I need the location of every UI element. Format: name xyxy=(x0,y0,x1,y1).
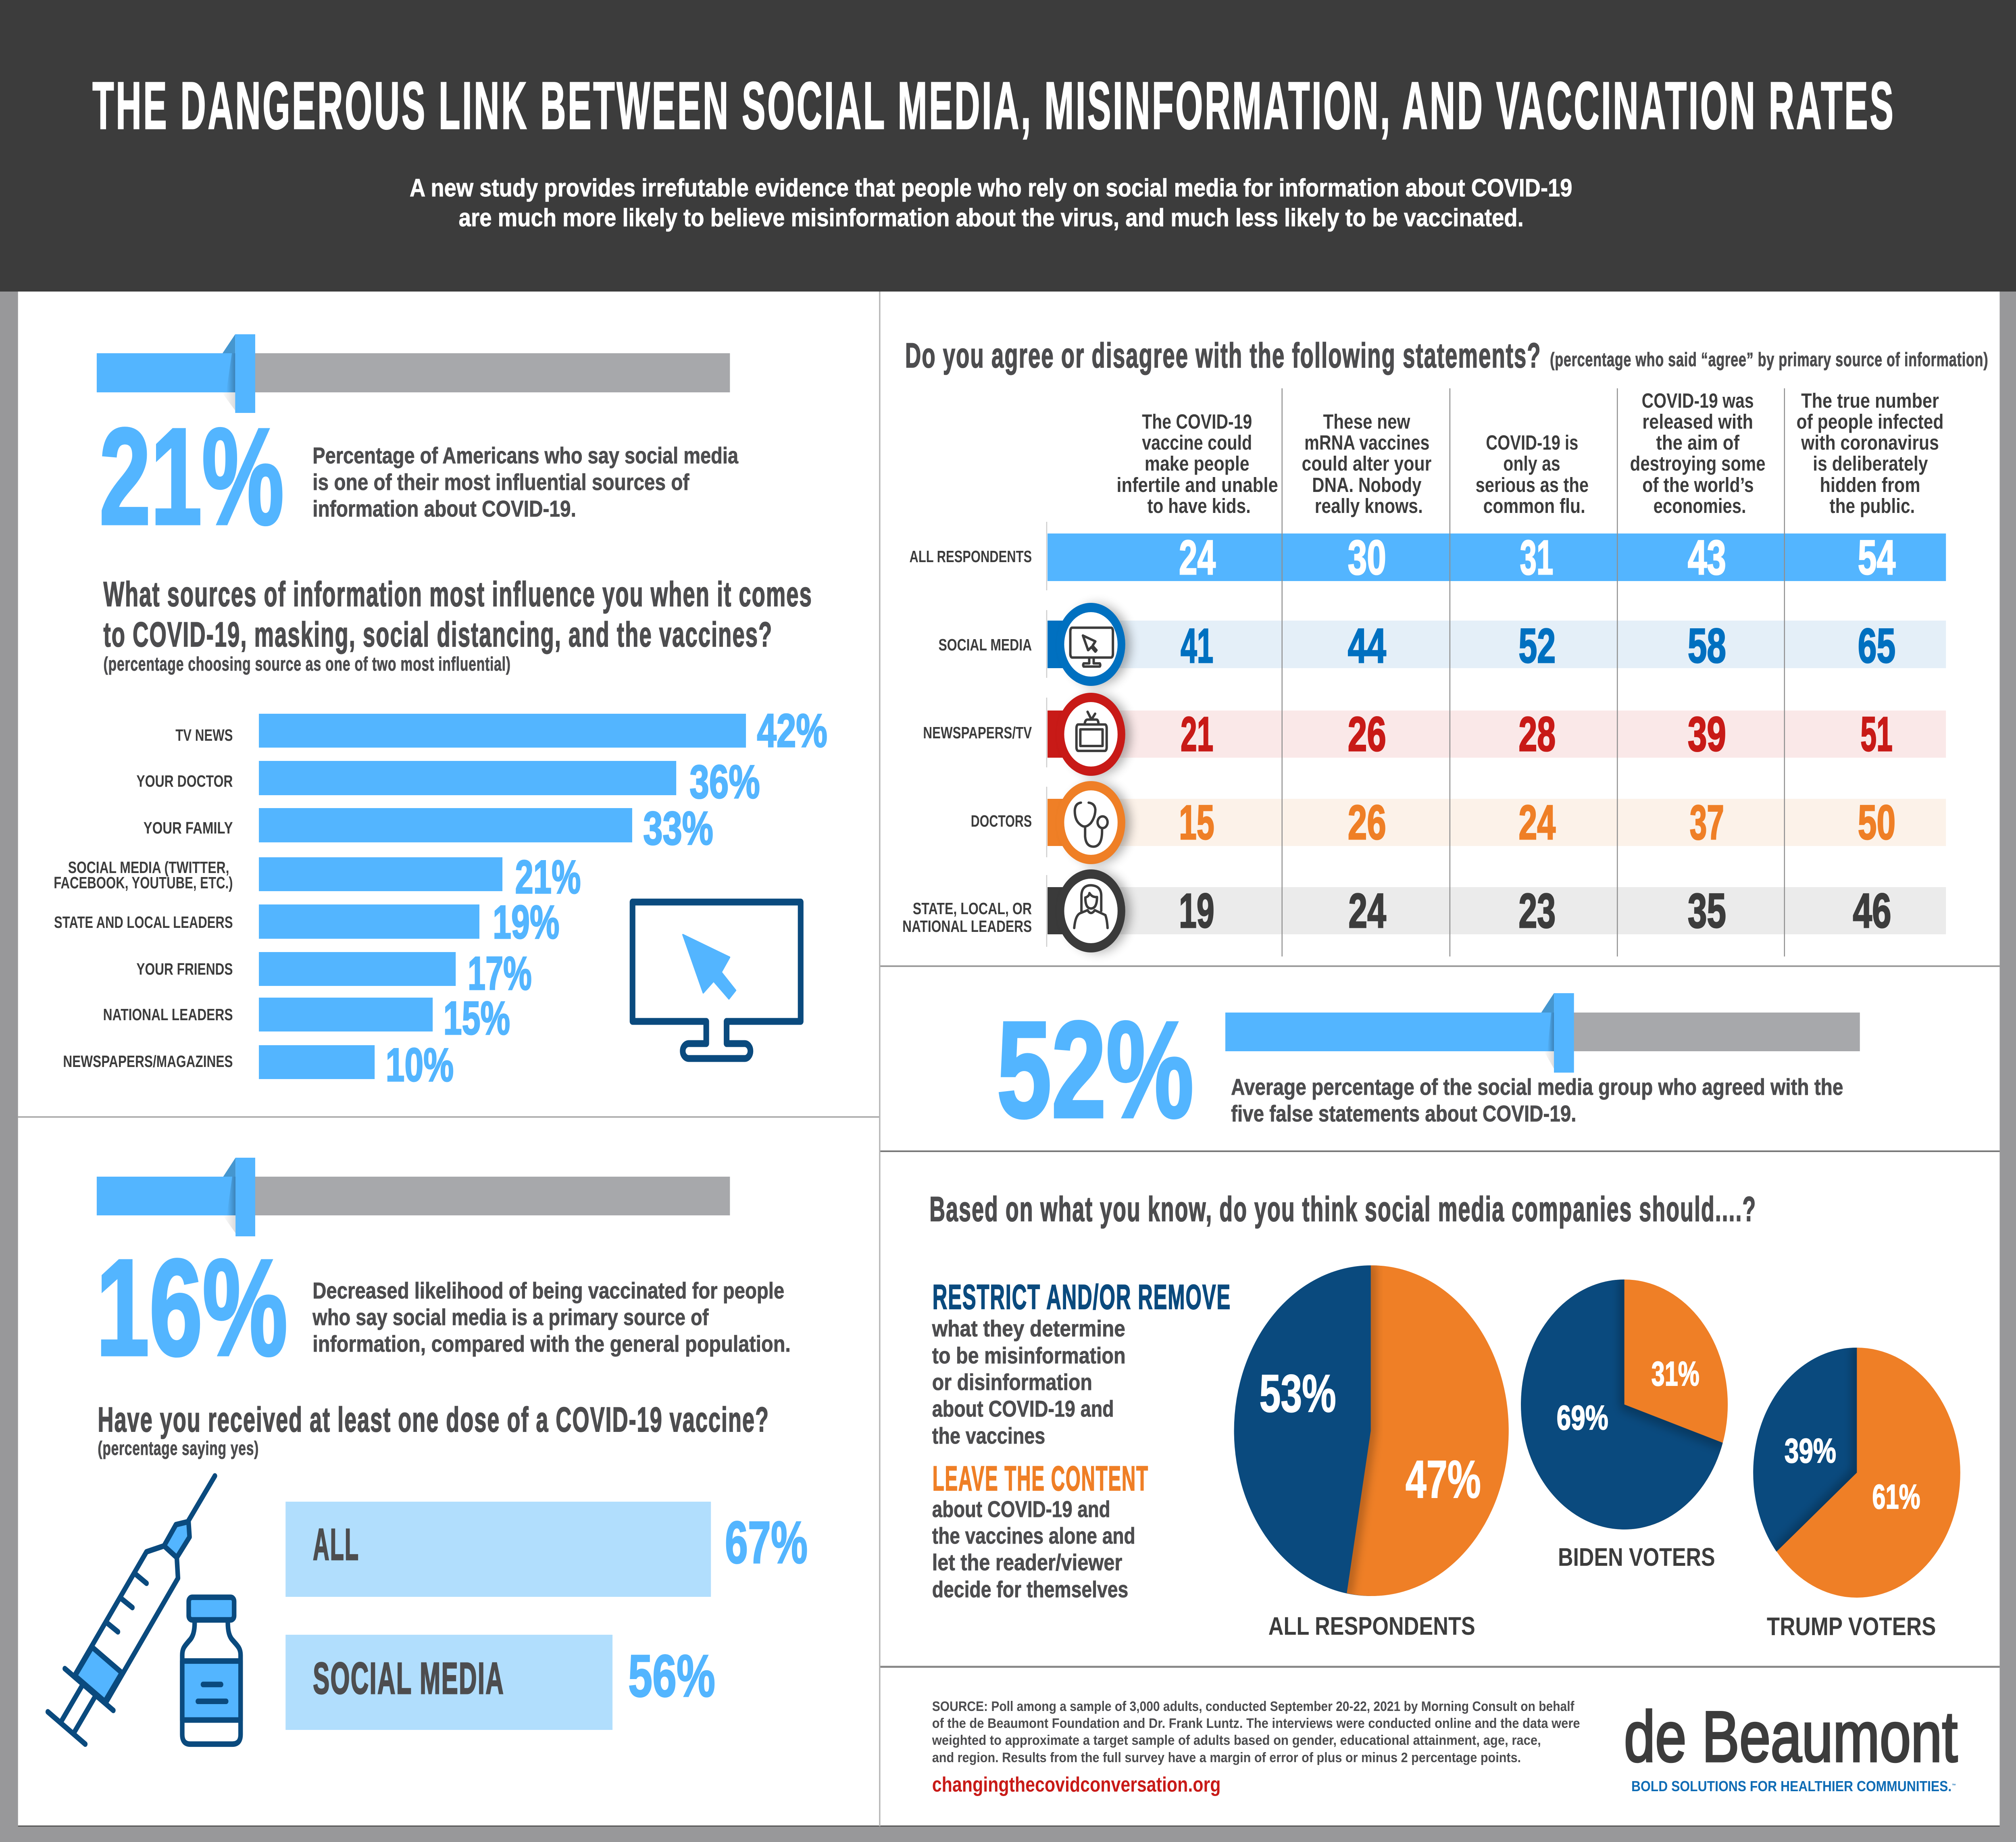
logo: de Beaumont: BOLD SOLUTIONS FOR HEALTHIER COMMUNITIES. xyxy=(1631,1778,1951,1794)
column 5 header: of people infected xyxy=(1797,410,1943,433)
row: all respondents xyxy=(910,530,1946,585)
bar: your doctor: 36% xyxy=(689,755,760,808)
column 2 header: DNA. Nobody xyxy=(1312,473,1422,496)
panel: 16 percent stat xyxy=(96,1158,791,1384)
row: all respondents: 24 xyxy=(1179,530,1216,585)
source note: of the de Beaumont Foundation and Dr. Frank Luntz. The interviews were conducted online and the data were xyxy=(932,1715,1580,1731)
row: social media: 58 xyxy=(1688,618,1726,673)
bar: your family xyxy=(144,802,713,854)
logo: de Beaumont: ™ xyxy=(1952,1783,1956,1788)
row: newspapers and TV: 51 xyxy=(1860,706,1893,761)
row: state, local, or national leaders: 24 xyxy=(1348,883,1386,938)
bar: TV news xyxy=(175,704,827,757)
column 1 header xyxy=(1116,410,1278,517)
legend: restrict and/or remove: or disinformation xyxy=(932,1370,1092,1395)
progress bar: 16 percent xyxy=(97,1158,730,1236)
heading: vaccine dose question: (percentage saying yes) xyxy=(98,1438,259,1459)
heading: sources of information xyxy=(103,575,812,675)
bar: all: 67% xyxy=(725,1509,808,1576)
bar: social media: 21% xyxy=(515,850,581,903)
column 3 header: serious as the xyxy=(1476,473,1589,496)
description: Percentage of Americans who say social media xyxy=(312,443,739,469)
heading: vaccine dose question: Have you received at least one dose of a COVID-19 vaccine? xyxy=(98,1400,769,1439)
bar: state and local leaders xyxy=(54,896,560,948)
source note: SOURCE: Poll among a sample of 3,000 adults, conducted September 20-22, 2021 by Morning Consult on behalf xyxy=(932,1698,1574,1714)
column 5 header: the public. xyxy=(1829,494,1915,517)
pie chart: Trump voters: 39% xyxy=(1785,1432,1836,1470)
heading: social media companies question: Based on what you know, do you think social media companies should....? xyxy=(929,1190,1756,1229)
row: newspapers and TV: 39 xyxy=(1688,706,1726,761)
column 5 header: hidden from xyxy=(1820,473,1920,496)
column 4 header: economies. xyxy=(1654,494,1746,517)
row: newspapers and TV: 26 xyxy=(1348,706,1386,761)
legend: leave the content: decide for themselves xyxy=(932,1577,1128,1602)
bar: newspapers and magazines: NEWSPAPERS/MAGAZINES xyxy=(63,1052,233,1071)
row: state, local, or national leaders: 35 xyxy=(1688,883,1726,938)
bar: social media xyxy=(285,1635,715,1730)
icon: social media badge xyxy=(1056,603,1131,686)
column 2 header: could alter your xyxy=(1302,452,1431,475)
column 2 header xyxy=(1302,410,1431,517)
icon: stethoscope badge xyxy=(1056,781,1131,864)
bar: national leaders: 15% xyxy=(444,992,510,1044)
description: Average percentage of the social media group who agreed with the xyxy=(1231,1075,1843,1100)
pie chart: Biden voters: 69% xyxy=(1557,1398,1608,1437)
bar: all xyxy=(285,1502,808,1597)
bar: social media: 56% xyxy=(628,1642,715,1709)
icon: syringe and vial xyxy=(48,1476,241,1744)
panel: 52 percent stat xyxy=(997,993,1860,1146)
row: doctors: 26 xyxy=(1348,795,1386,850)
pie chart: Trump voters xyxy=(1753,1345,1960,1641)
pie chart: all respondents: 53% xyxy=(1259,1363,1336,1423)
column 2 header: mRNA vaccines xyxy=(1304,431,1429,454)
bar: your family: 33% xyxy=(643,802,713,854)
bar chart: sources of information xyxy=(54,704,827,1091)
bar: TV news: TV NEWS xyxy=(175,726,233,744)
row: newspapers and TV xyxy=(923,693,1946,776)
bar: your friends xyxy=(136,947,532,1000)
column 3 header xyxy=(1476,431,1589,517)
bar: state and local leaders: 19% xyxy=(493,896,560,948)
row: newspapers and TV: 28 xyxy=(1518,706,1556,761)
legend: leave the content: the vaccines alone and xyxy=(932,1523,1135,1549)
pie chart: all respondents xyxy=(1234,1262,1509,1640)
column 1 header: to have kids. xyxy=(1147,494,1251,517)
icon: leader badge xyxy=(1056,869,1131,952)
progress bar: 52 percent xyxy=(1225,993,1860,1073)
description xyxy=(1231,1075,1843,1127)
heading: sources of information: to COVID-19, masking, social distancing, and the vaccines? xyxy=(103,615,773,654)
row: state, local, or national leaders: NATIONAL LEADERS xyxy=(902,917,1032,936)
column 1 header: vaccine could xyxy=(1142,431,1252,454)
big number 21%: 21% xyxy=(100,400,284,553)
bar: national leaders xyxy=(103,992,510,1044)
subtitle xyxy=(410,174,1572,232)
row: social media xyxy=(938,603,1946,686)
row: all respondents: ALL RESPONDENTS xyxy=(910,547,1032,566)
legend: restrict and/or remove: about COVID-19 and xyxy=(932,1396,1114,1422)
row: state, local, or national leaders xyxy=(902,869,1946,952)
row: doctors: 24 xyxy=(1518,795,1556,850)
column 4 header: destroying some xyxy=(1630,452,1766,475)
column 3 header: COVID-19 is xyxy=(1486,431,1578,454)
row: state, local, or national leaders: STATE, LOCAL, OR xyxy=(913,899,1032,918)
row: all respondents: 43 xyxy=(1688,530,1726,585)
column 5 header: with coronavirus xyxy=(1801,431,1939,454)
pie chart: Biden voters: BIDEN VOTERS xyxy=(1558,1543,1715,1571)
pie chart: Biden voters xyxy=(1521,1276,1728,1571)
row: state, local, or national leaders: 46 xyxy=(1853,883,1891,938)
icon: monitor with cursor xyxy=(633,902,801,1059)
pie chart: Trump voters: TRUMP VOTERS xyxy=(1767,1613,1936,1641)
description: five false statements about COVID-19. xyxy=(1231,1101,1576,1127)
subtitle: A new study provides irrefutable evidence that people who rely on social media for information about COVID-19 xyxy=(410,174,1572,202)
description: Decreased likelihood of being vaccinated for people xyxy=(312,1278,784,1304)
pie chart: Trump voters: 61% xyxy=(1872,1477,1920,1516)
column headers xyxy=(1116,389,1943,517)
column 2 header: These new xyxy=(1323,410,1410,433)
row: newspapers and TV: NEWSPAPERS/TV xyxy=(923,723,1032,742)
row: state, local, or national leaders: 23 xyxy=(1518,883,1556,938)
panel: header band xyxy=(0,0,2016,292)
bar: your family: YOUR FAMILY xyxy=(144,819,233,837)
bar: social media: FACEBOOK, YOUTUBE, ETC.) xyxy=(54,873,233,892)
icon: television badge xyxy=(1056,693,1131,776)
row: all respondents: 54 xyxy=(1858,530,1895,585)
description xyxy=(312,1278,791,1357)
column 5 header xyxy=(1797,389,1943,517)
panel: 21 percent stat xyxy=(97,334,739,553)
big number 16%: 16% xyxy=(96,1231,287,1384)
column 5 header: is deliberately xyxy=(1813,452,1928,475)
source note: weighted to approximate a target sample of adults based on gender, educational attainment, age, race, xyxy=(932,1732,1541,1748)
legend: restrict and/or remove: RESTRICT AND/OR REMOVE xyxy=(933,1278,1231,1317)
row: all respondents: 30 xyxy=(1348,530,1386,585)
source note: and region. Results from the full survey have a margin of error of plus or minus 2 percentage points. xyxy=(932,1750,1521,1765)
subtitle: are much more likely to believe misinformation about the virus, and much less likely to be vaccinated. xyxy=(459,204,1524,232)
description: who say social media is a primary source of xyxy=(312,1305,709,1330)
bar: your friends: 17% xyxy=(468,947,532,1000)
column 4 header: COVID-19 was xyxy=(1642,389,1754,412)
bar: newspapers and magazines: 10% xyxy=(385,1038,454,1091)
row: doctors: 15 xyxy=(1179,795,1214,850)
column 3 header: common flu. xyxy=(1483,494,1585,517)
pie chart: all respondents: ALL RESPONDENTS xyxy=(1268,1612,1475,1640)
description: information about COVID-19. xyxy=(312,496,576,522)
heading: sources of information: What sources of information most influence you when it comes xyxy=(103,575,812,614)
heading: agree or disagree: Do you agree or disagree with the following statements? xyxy=(905,336,1541,375)
description: information, compared with the general population. xyxy=(312,1331,791,1357)
legend: leave the content: about COVID-19 and xyxy=(932,1497,1110,1522)
column 4 header: of the world’s xyxy=(1642,473,1754,496)
legend: restrict and/or remove xyxy=(932,1278,1231,1449)
bar: social media xyxy=(54,850,581,903)
row: doctors: 37 xyxy=(1690,795,1724,850)
heading: sources of information: (percentage choosing source as one of two most influential) xyxy=(103,654,511,675)
row: newspapers and TV: 21 xyxy=(1181,706,1213,761)
column 1 header: make people xyxy=(1145,452,1250,475)
description xyxy=(312,443,739,522)
legend: leave the content: LEAVE THE CONTENT xyxy=(933,1459,1149,1498)
pie chart: Biden voters: 31% xyxy=(1652,1354,1699,1393)
row: social media: 52 xyxy=(1518,618,1556,673)
column 4 header: released with xyxy=(1642,410,1753,433)
bar: social media: SOCIAL MEDIA xyxy=(313,1654,504,1703)
column 5 header: The true number xyxy=(1801,389,1939,412)
column 2 header: really knows. xyxy=(1315,494,1423,517)
row: all respondents: 31 xyxy=(1520,530,1553,585)
bar: state and local leaders: STATE AND LOCAL LEADERS xyxy=(54,913,233,931)
bar chart: vaccination rate xyxy=(285,1502,808,1730)
legend: restrict and/or remove: what they determine xyxy=(932,1316,1125,1342)
bar: social media: SOCIAL MEDIA (TWITTER, xyxy=(68,858,229,877)
row: social media: SOCIAL MEDIA xyxy=(938,636,1032,654)
row: state, local, or national leaders: 19 xyxy=(1179,883,1214,938)
bar: newspapers and magazines xyxy=(63,1038,454,1091)
column 4 header xyxy=(1630,389,1766,517)
bar: TV news: 42% xyxy=(757,704,827,757)
legend: restrict and/or remove: to be misinformation xyxy=(932,1343,1126,1369)
pie chart: all respondents: 47% xyxy=(1406,1449,1481,1509)
legend: leave the content: let the reader/viewer xyxy=(932,1550,1122,1575)
column 4 header: the aim of xyxy=(1656,431,1739,454)
legend: restrict and/or remove: the vaccines xyxy=(932,1423,1045,1449)
row: doctors xyxy=(971,781,1946,864)
row: social media: 65 xyxy=(1858,618,1895,673)
logo: de Beaumont: de Beaumont xyxy=(1624,1696,1958,1777)
progress bar: 21 percent xyxy=(97,334,730,413)
description: is one of their most influential sources of xyxy=(312,470,689,495)
bar: your doctor: YOUR DOCTOR xyxy=(136,772,233,790)
heading: vaccine dose question xyxy=(98,1400,769,1459)
website link: changingthecovidconversation.org xyxy=(932,1773,1220,1796)
column 1 header: The COVID-19 xyxy=(1142,410,1252,433)
big number 52%: 52% xyxy=(997,994,1193,1146)
row: social media: 41 xyxy=(1181,618,1213,673)
row: doctors: DOCTORS xyxy=(971,812,1032,830)
bar: your friends: YOUR FRIENDS xyxy=(136,960,233,978)
legend: leave the content xyxy=(932,1459,1149,1602)
bar: all: ALL xyxy=(313,1520,359,1569)
bar: your doctor xyxy=(136,755,760,808)
source note xyxy=(932,1698,1580,1765)
row: doctors: 50 xyxy=(1858,795,1895,850)
row: social media: 44 xyxy=(1348,618,1386,673)
column 3 header: only as xyxy=(1503,452,1560,475)
bar: national leaders: NATIONAL LEADERS xyxy=(103,1005,233,1024)
table: false statements agreement xyxy=(902,388,1946,956)
column 1 header: infertile and unable xyxy=(1116,473,1278,496)
